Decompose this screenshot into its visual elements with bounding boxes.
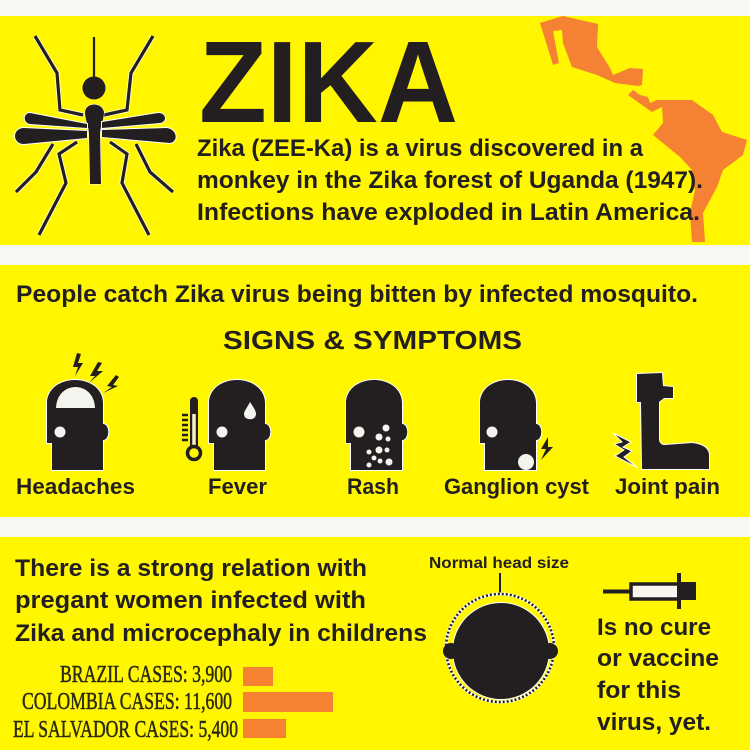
chart: cases by country: EL SALVADOR CASES: 5,400 xyxy=(13,717,238,743)
microcephaly text xyxy=(15,555,427,647)
no cure text xyxy=(597,614,719,736)
icon: mosquito xyxy=(15,36,176,235)
intro text xyxy=(197,135,703,226)
chart: cases by country: COLOMBIA CASES: 11,600 xyxy=(22,689,232,715)
icon: fever head and thermometer xyxy=(182,380,270,470)
map: Latin America xyxy=(540,16,747,242)
icon: microcephaly head xyxy=(443,573,558,702)
panel: signs and symptoms xyxy=(0,265,750,517)
icon: joint pain xyxy=(613,373,709,469)
icon: syringe xyxy=(603,573,696,609)
symptoms heading: SIGNS & SYMPTOMS xyxy=(223,325,522,355)
no cure text: or vaccine xyxy=(597,645,719,672)
microcephaly text: Zika and microcephaly in childrens xyxy=(15,620,427,647)
microcephaly text: There is a strong relation with xyxy=(15,555,367,582)
transmission sentence: People catch Zika virus being bitten by infected mosquito. xyxy=(16,281,698,308)
chart: cases by country xyxy=(13,662,333,743)
microcephaly text: pregant women infected with xyxy=(15,587,366,614)
intro text: monkey in the Zika forest of Uganda (1947). xyxy=(197,167,703,194)
label: headaches: Headaches xyxy=(16,474,135,499)
label: ganglion cyst: Ganglion cyst xyxy=(444,474,590,499)
panel: header xyxy=(0,16,750,245)
no cure text: Is no cure xyxy=(597,614,711,641)
icon: headache head xyxy=(47,353,119,470)
intro text: Zika (ZEE-Ka) is a virus discovered in a xyxy=(197,135,644,162)
label: joint pain: Joint pain xyxy=(615,474,720,499)
label: rash: Rash xyxy=(347,474,399,499)
icon: rash head xyxy=(346,380,407,470)
label: fever: Fever xyxy=(208,474,267,499)
label: normal head size: Normal head size xyxy=(429,555,569,572)
icon: ganglion cyst head xyxy=(480,380,553,470)
no cure text: for this xyxy=(597,677,681,704)
title: ZIKA xyxy=(199,17,458,147)
intro text: Infections have exploded in Latin America. xyxy=(197,199,700,226)
panel: microcephaly and cases xyxy=(0,537,750,750)
no cure text: virus, yet. xyxy=(597,709,711,736)
chart: cases by country: BRAZIL CASES: 3,900 xyxy=(60,662,232,688)
